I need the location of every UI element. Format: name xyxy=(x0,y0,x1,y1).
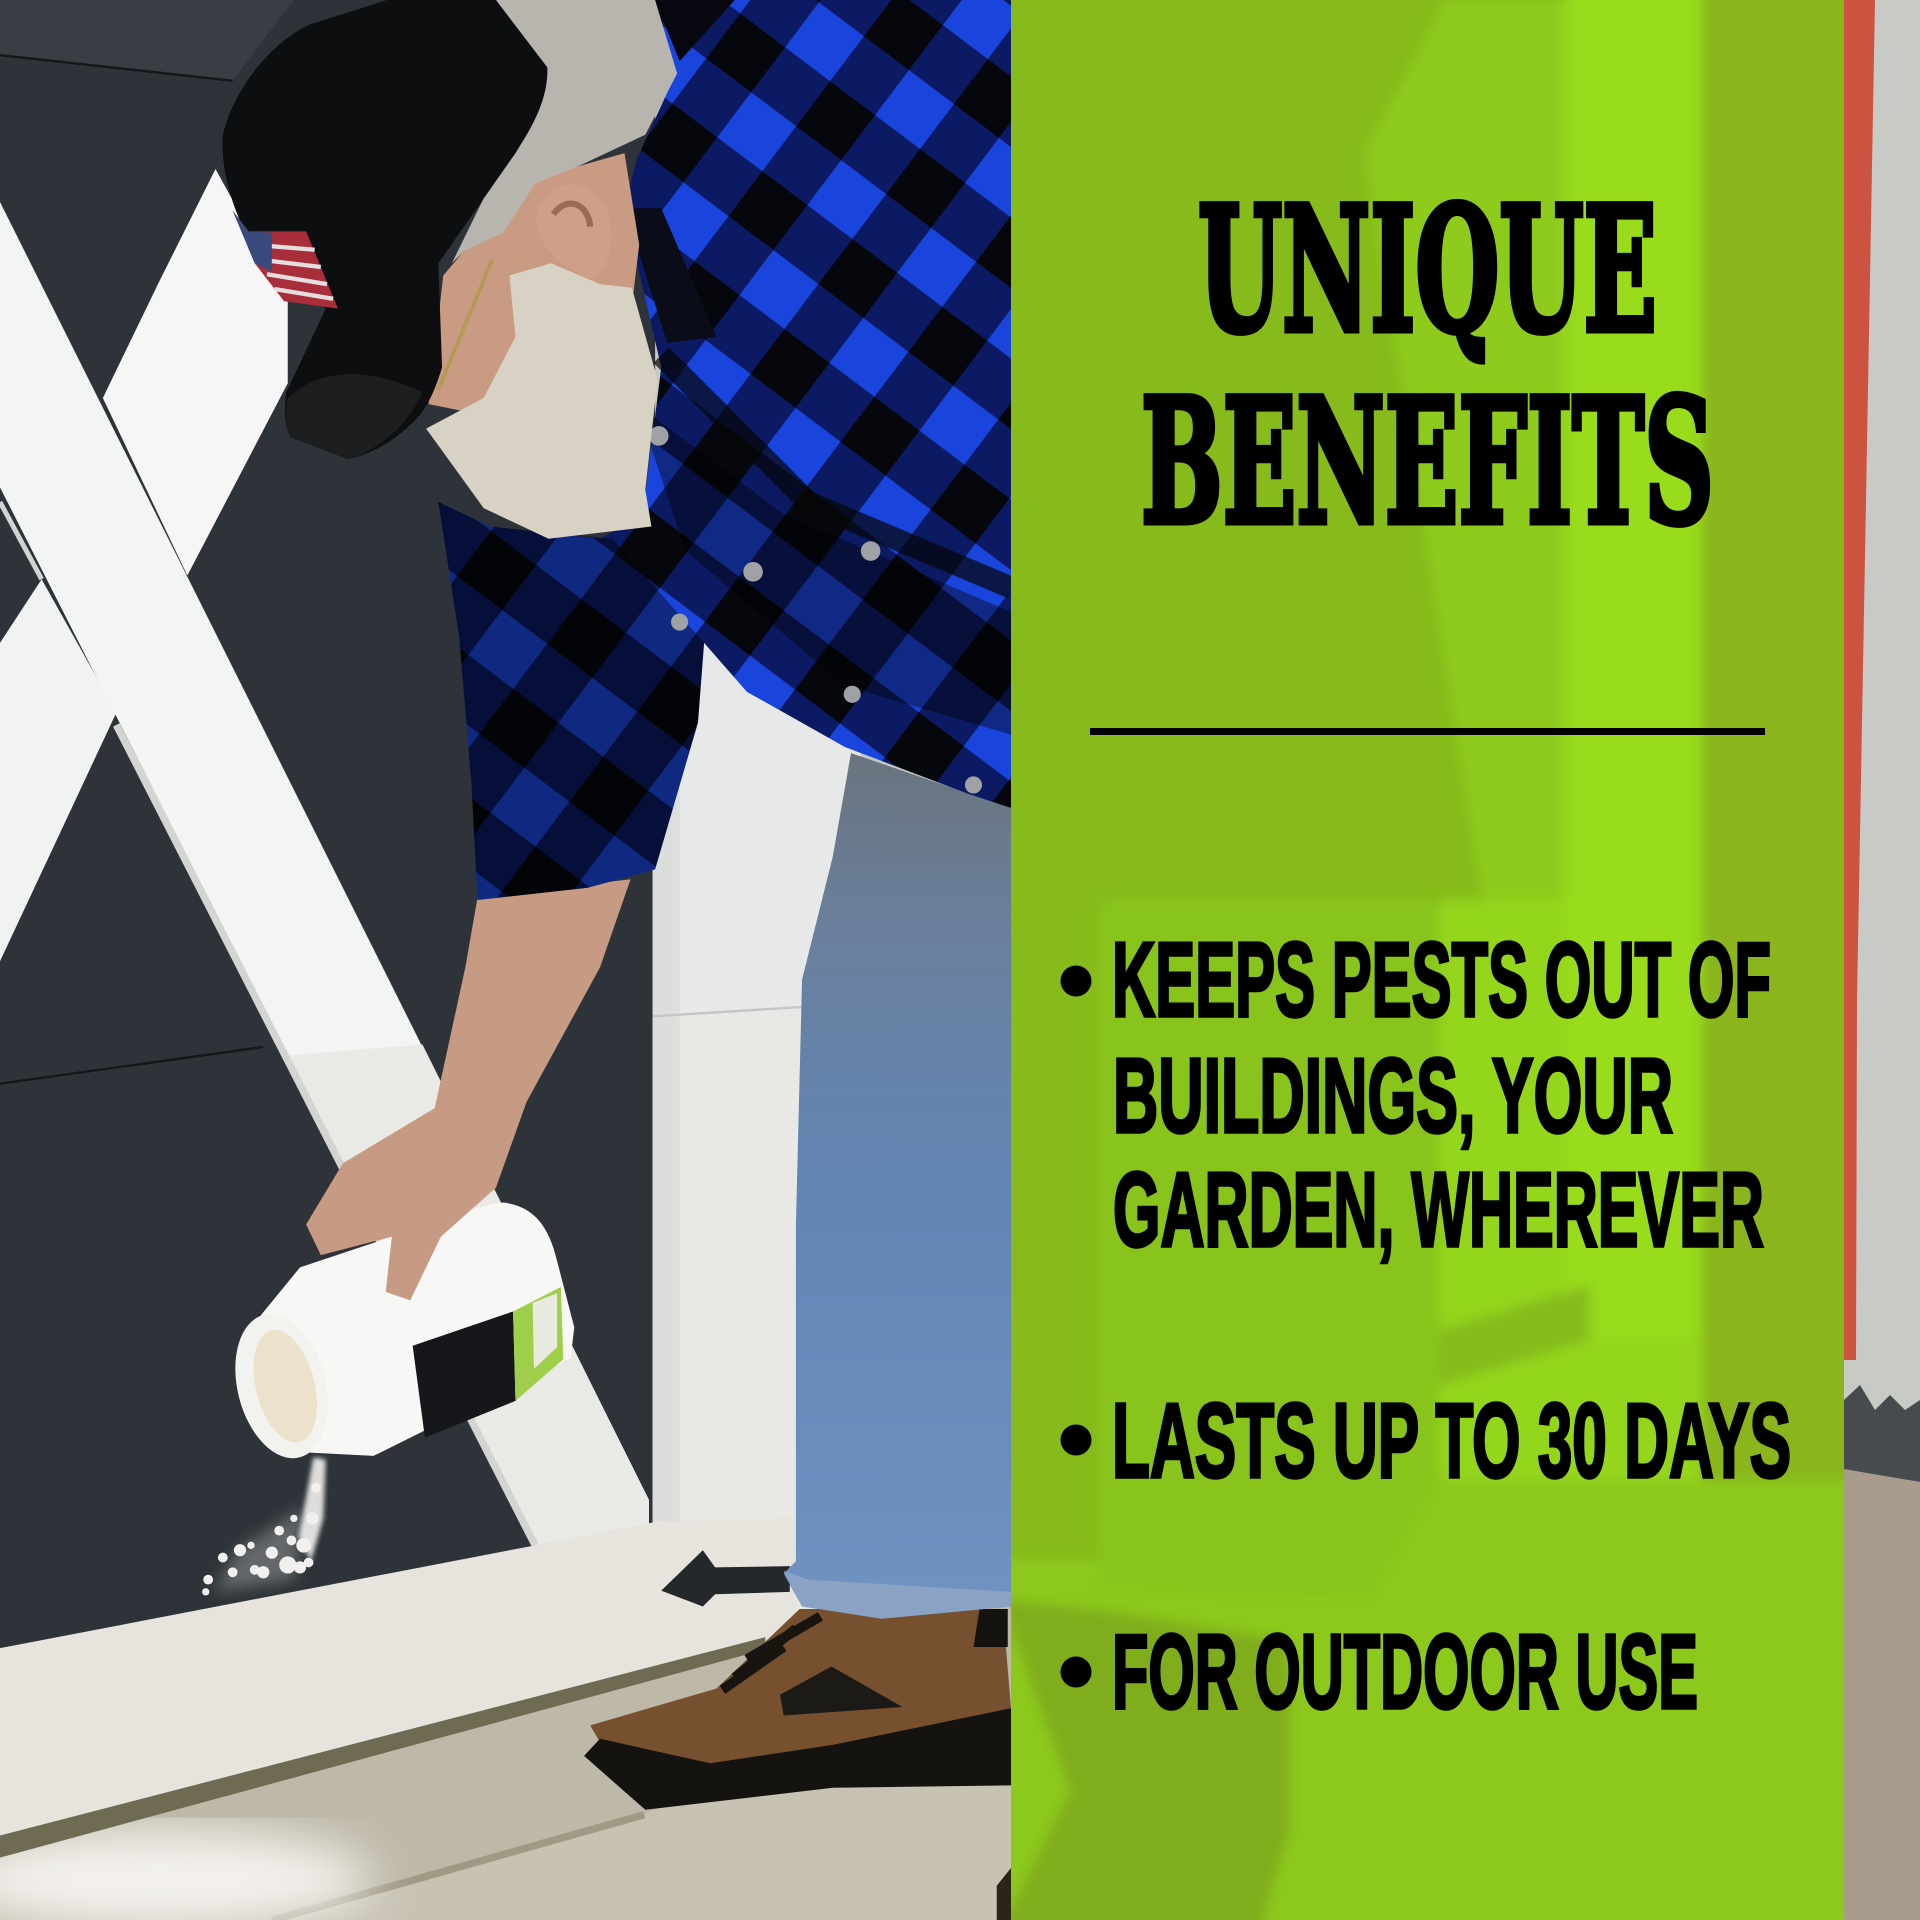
door dark panels xyxy=(0,0,655,1653)
green translucent panel xyxy=(1000,0,1862,1920)
background wall to the right of panel xyxy=(1844,0,1920,1920)
shirt xyxy=(438,0,1011,900)
divider xyxy=(1090,728,1765,735)
benefit: for outdoor use xyxy=(1060,1613,1698,1731)
bottom rail xyxy=(0,1518,796,1858)
photo: man pouring powder by barn door xyxy=(0,0,1011,1920)
bottle xyxy=(221,1202,574,1468)
title xyxy=(1141,168,1714,563)
boot xyxy=(584,1609,1011,1920)
benefit: keeps pests out xyxy=(1060,921,1771,1269)
hair xyxy=(452,0,677,263)
flag patch xyxy=(233,211,338,309)
concrete ground xyxy=(0,1592,1011,1920)
red door edge xyxy=(1844,0,1875,1360)
white trellis X xyxy=(0,169,649,1545)
jeans xyxy=(784,753,1011,1619)
face and ear xyxy=(429,153,639,416)
cap xyxy=(223,0,547,459)
powder falling xyxy=(202,1457,326,1596)
forearm and hand xyxy=(306,879,631,1300)
door right frame xyxy=(653,643,861,1629)
shirt buttons xyxy=(649,426,982,793)
hinge xyxy=(661,1550,790,1607)
glasses arm xyxy=(438,260,492,389)
bottle label xyxy=(413,1311,516,1438)
floor xyxy=(1844,1469,1920,1920)
beard xyxy=(426,263,658,539)
jeans cuff xyxy=(784,1571,1011,1619)
